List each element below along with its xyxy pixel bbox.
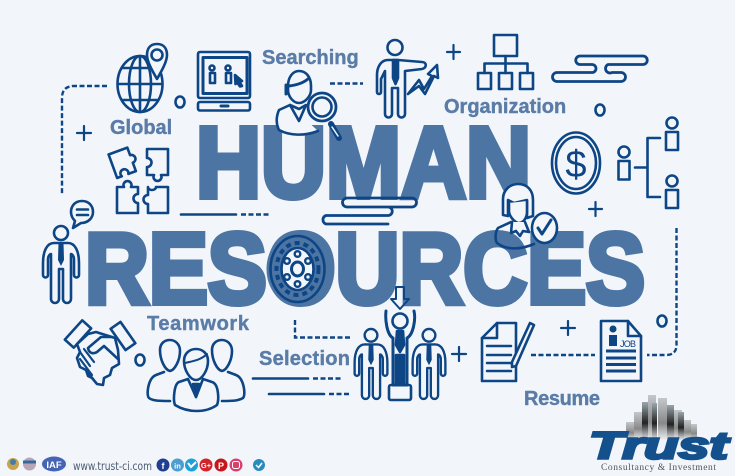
title: RESOURCES: RESOURCES [85,213,645,325]
heading: Global: Global [110,117,172,139]
icon: handshake [65,320,135,385]
logo: Trust Consultancy [589,395,730,473]
footer: social icons: f [162,461,166,471]
footer: certification badges [7,456,66,472]
footer: social icons: in [174,462,181,470]
icon: searching person [277,71,339,138]
icon: org chart [478,35,533,89]
icon: selection men [355,287,445,400]
title: HUMAN: HUMAN [196,107,531,219]
line: teamwork lower [269,393,351,395]
icon: dollar coin [552,132,600,194]
logo: Trust Consultancy: Trust [589,426,730,468]
logo buildings [626,395,697,440]
heading: Teamwork: Teamwork [147,313,250,335]
heading: Organization: Organization [444,96,566,118]
icon: presenter with chart [377,40,438,118]
footer: website: www.trust-ci.com [73,459,152,473]
decorative cloud line: upper [552,56,647,82]
decorative cloud line: center [323,198,416,224]
heading: Selection: Selection [259,348,350,370]
icon: job resume [601,321,641,381]
dashed connector: right [647,228,676,355]
logo: Trust Consultancy: Consultancy & Investment [601,463,716,473]
footer: social icons: P [218,461,224,471]
icon: man with speech bubble [43,201,93,303]
heading: Resume: Resume [524,388,600,410]
line: teamwork upper [253,377,343,380]
plus signs [77,45,602,361]
footer: social icons [156,458,265,472]
dashed connector: searching [330,82,363,85]
icon: gear in O [266,232,328,306]
icon: people hierarchy [618,118,678,208]
icon: dollar coin: $ [565,144,587,186]
icon: job resume: JOB [620,339,636,349]
small circles [136,96,666,366]
heading: Searching: Searching [262,47,359,69]
footer: certification badges: IAF [46,460,62,471]
dashed connector: documents [531,354,595,356]
icon: team [148,340,244,411]
footer: social icons: G+ [201,461,212,470]
winner [386,287,415,400]
dashed connector: top left [62,86,107,195]
dashed connector: selection [295,320,351,338]
icon: laptop [198,52,250,110]
icon: globe with pin [118,44,167,112]
icon: woman with check badge [496,184,557,248]
icon: puzzle [109,146,168,213]
line: below puzzle [181,213,271,216]
icon: document with pen [482,323,534,381]
